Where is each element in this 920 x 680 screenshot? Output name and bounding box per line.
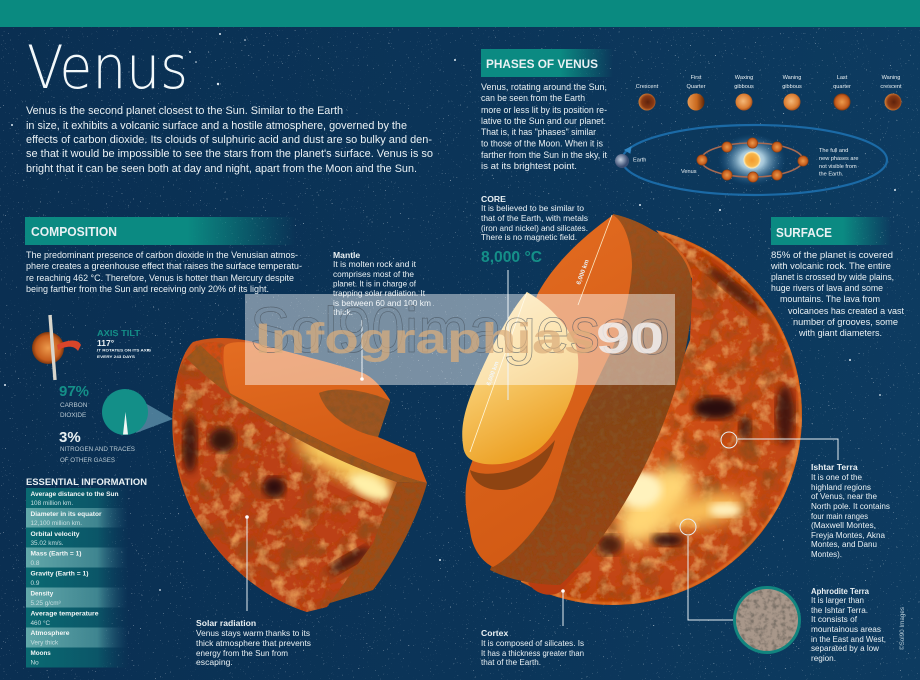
phases text: to those of the Moon. When it is [481,138,603,148]
axis tilt label [97,329,152,359]
data table: Atmosphere [30,630,70,637]
surface text: number of grooves, some [793,317,898,327]
data table: 108 million km. [30,500,73,507]
phase labels: gibbous [734,84,754,90]
callout: Mantle: trapping solar radiation. It [333,288,426,298]
data table [26,488,128,668]
data table: 0.8 [30,560,40,567]
phase labels: Last [837,75,848,81]
data table: Moons [30,650,51,657]
callout: Ishtar Terra: four main ranges [811,511,868,521]
callout: Ishtar Terra [721,432,890,559]
callout: Solar radiation: Venus stays warm thanks to its [196,628,310,638]
callout: Mantle: Mantle [333,250,360,260]
callout: Solar radiation [196,515,311,667]
composition heading [25,217,295,245]
callout: Cortex [481,589,584,667]
atmosphere percentages: 97% [59,383,89,400]
orbit diagram [615,125,887,195]
callout: Aphrodite Terra: Aphrodite Terra [811,586,869,596]
callout: Solar radiation: thick atmosphere that prevents [196,638,311,648]
watermark: 90 [596,314,664,363]
callout: Ishtar Terra: Freyja Montes, Akna [811,530,885,540]
Sun [744,152,760,168]
callout: Core: that of the Earth, with metals [481,213,588,223]
data table: 5.25 g/cm³ [30,600,61,607]
orbit labels: new phases are [819,156,858,162]
phase labels: gibbous [782,84,802,90]
data table: Mass (Earth = 1) [30,550,82,558]
callout: Ishtar Terra: Montes). [811,549,842,559]
intro text: effects of carbon dioxide. Its clouds of sulphuric acid and dust are so bulky and den- [26,134,432,146]
illustration: right Venus section [462,214,802,605]
callout: Cortex: It has a thickness greater than [481,648,584,658]
callout: Core: It is believed to be similar to [481,203,584,213]
callout: Core [481,194,588,400]
atmosphere percentages: 3% [59,429,81,446]
essential information heading: ESSENTIAL INFORMATION [26,477,147,487]
Venus orbit [701,143,803,177]
phases text: farther from the Sun in the sky, it [481,150,607,160]
atmosphere percentages: CARBON [60,402,88,409]
Venus positions [696,138,808,182]
surface text: huge rivers of lava and some [771,283,883,293]
phase labels: Waning [783,75,801,81]
callout: Ishtar Terra: North pole. It contains [811,501,890,511]
phases text: Venus, rotating around the Sun, [481,82,607,92]
callout: Ishtar Terra: Ishtar Terra [811,462,858,472]
atmosphere pie chart [102,389,173,435]
data table: Diameter in its equator [30,511,102,518]
atmosphere percentages [59,383,135,464]
surface text: planet is crossed by wide plains, [771,272,894,282]
orbit labels: The full and [819,148,848,154]
callout: Mantle: thick. [333,307,353,317]
orange mantle face [223,342,427,483]
phases text: That is, it has "phases" similar [481,127,596,137]
orbit labels: not visible from [819,164,857,170]
data table: Average distance to the Sun [30,491,119,498]
data table: 460 °C [30,619,50,627]
panel: surface [770,217,904,338]
inner core [462,292,578,464]
core shadow [470,440,555,490]
phase labels: Waxing [735,75,753,81]
callout: Ishtar Terra: (Maxwell Montes, [811,520,876,530]
diameter markers: 6,000 km [486,361,501,387]
phase labels [636,75,902,90]
orbit labels: Earth [633,158,646,164]
top bar [0,0,920,27]
mantle hollow [319,390,390,437]
axis tilt label: EVERY 243 DAYS [97,355,136,359]
watermark: Sol90images [250,294,600,366]
planet surface quarter [173,358,397,612]
phases text: more or less lit by its position re- [481,105,607,115]
intro text: in size, it exhibits a volcanic surface and a hostile atmosphere, governed by the [26,120,407,132]
phase labels: Crescent [636,84,659,90]
image credit: ©Sol90 Images [899,607,906,650]
phase labels: Waning [882,75,900,81]
panel: composition [25,217,302,464]
intro text: Venus is the second planet closest to the Sun. Similar to the Earth [26,105,343,117]
watermark: Infographias [255,315,595,363]
callout: Aphrodite Terra: in the East and West, [811,634,886,644]
callout: Cortex: that of the Earth. [481,657,541,667]
callout: Ishtar Terra: of Venus, near the [811,491,877,501]
composition text: being farther from the Sun and receiving only 20% of its light. [26,284,269,294]
callout: Mantle: comprises most of the [333,269,414,279]
Earth orbit [622,125,887,195]
data table: 35.02 km/s. [30,540,64,547]
surface text [770,250,904,338]
icon: rock sample [733,586,801,654]
callout: Mantle [333,250,431,381]
phases text: can be seen from the Earth [481,93,585,103]
data table: Density [30,590,54,598]
data table: Very thick [30,640,59,646]
outer rim [172,338,307,612]
icon: axis tilt planet [32,315,81,380]
callout: Solar radiation: escaping. [196,657,233,667]
cortex bottom [528,570,580,595]
orbit arrow [625,147,631,153]
orbit labels [633,148,858,178]
phase labels: Quarter [687,84,706,90]
composition text [26,250,302,294]
phase labels: crescent [880,84,902,90]
callout: Core: (iron and nickel) and silicates. [481,223,588,233]
surface text: volcanoes has created a vast [788,306,904,316]
callout: Mantle: It is molten rock and it [333,259,417,269]
callout: Aphrodite Terra: It is larger than [811,595,864,605]
phase planets [638,94,902,110]
diameter markers [470,215,612,452]
surface text: with volcanic rock. The entire [770,261,891,271]
surface text: with giant diameters. [798,328,882,338]
callout: Aphrodite Terra: the Ishtar Terra. [811,605,868,615]
callout: Ishtar Terra: Montes, and Danu [811,539,877,549]
intro text: bright that it can be seen both at day and night, apart from the Moon and the Sun. [26,163,417,175]
callout: Aphrodite Terra [680,519,886,663]
callout: Aphrodite Terra: region. [811,653,836,663]
callout: Ishtar Terra: It is one of the [811,472,862,482]
phases text [481,82,607,171]
watermark: 90 [600,309,670,365]
data table: 12,100 million km. [30,520,82,527]
Sun glow [718,134,786,186]
callout: Mantle: planet. It is in charge of [333,278,417,288]
composition text: re reaching 462 °C. Therefore, Venus is hotter than Mercury despite [26,273,294,283]
icon: Earth [615,154,629,168]
shell body [490,214,692,585]
brown lower shell [330,482,427,603]
callout: Solar radiation: Solar radiation [196,618,256,628]
callout: Aphrodite Terra: separated by a low [811,643,880,653]
composition heading: COMPOSITION [31,225,117,239]
watermark [245,294,675,385]
atmosphere percentages: NITROGEN AND TRACES [60,446,135,453]
axis tilt label: 117° [97,338,115,348]
brown inner band [186,345,427,483]
phase labels: quarter [833,84,851,90]
core temperature: 8,000 °C [481,249,542,266]
axis tilt label: IT ROTATES ON ITS AXIS [97,348,152,352]
intro text [26,105,433,175]
phases heading [481,49,613,77]
atmosphere percentages: OF OTHER GASES [60,457,115,464]
callout: Core: There is no magnetic field. [481,232,577,242]
callout: Ishtar Terra: highland regions [811,482,871,492]
callout: Aphrodite Terra: mountainous areas [811,624,881,634]
diameter markers: 6,000 km [575,258,591,286]
planet surface [521,230,802,605]
surface text: 85% of the planet is covered [771,250,893,260]
intro text: se that it would be impossible to see the stars from the planet's surface. Venus is so [26,148,433,160]
panel: phases of Venus [481,49,902,195]
callout: Solar radiation: energy from the Sun from [196,648,288,658]
title: Venus [27,33,188,103]
shell rim [650,230,693,280]
phases heading: PHASES OF VENUS [486,57,598,71]
data table: No [30,660,39,666]
panel: essential information [26,477,147,668]
mantle cut face [466,215,632,567]
atmosphere percentages: DIOXIDE [60,412,86,419]
phase labels: First [691,75,702,81]
callout: Cortex: It is composed of silicates. Is [481,638,584,648]
phases text: is at its brightest point. [481,161,577,171]
callout: Mantle: is between 60 and 100 km [333,298,431,308]
callout: Cortex: Cortex [481,628,508,638]
data table: Orbital velocity [30,531,80,538]
phases text: lative to the Sun and our planet. [481,116,606,126]
data table: Average temperature [30,610,99,618]
callout: Core: CORE [481,194,506,204]
callout: Aphrodite Terra: It consists of [811,614,858,624]
axis tilt label: AXIS TILT [97,329,140,338]
surface heading: SURFACE [776,226,832,240]
composition text: The predominant presence of carbon dioxide in the Venusian atmos- [26,250,298,260]
orbit labels: the Earth. [819,172,844,178]
data table: Gravity (Earth = 1) [30,570,88,578]
illustration: left Venus section [165,338,427,620]
composition text: phere creates a greenhouse effect that raises the surface temperatu- [26,261,302,271]
surface text: mountains. The lava from [780,294,880,304]
data table: 0.9 [30,580,40,587]
orbit labels: Venus [681,169,697,175]
